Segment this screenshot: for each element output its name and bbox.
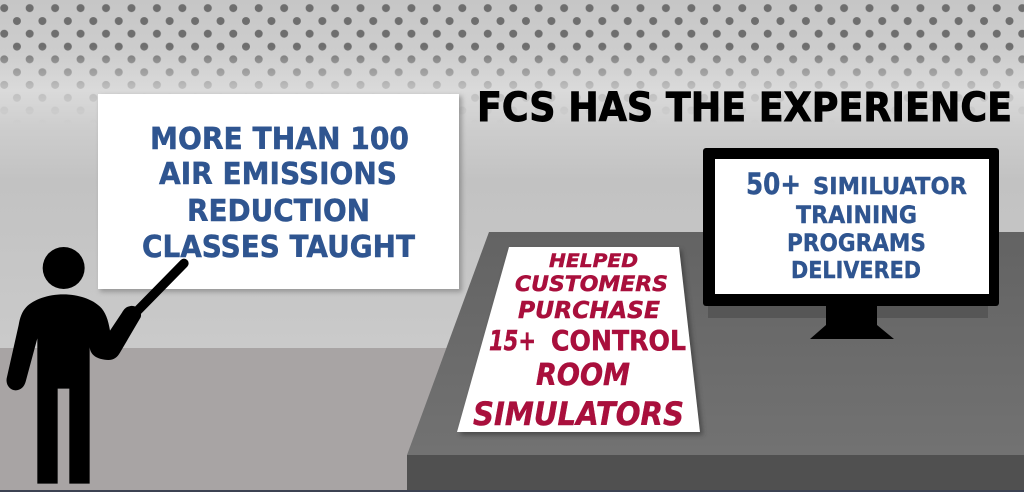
text: classes taught: MORE THAN 100 [150, 122, 409, 157]
text: simulator training programs: SIMILUATOR [813, 174, 967, 200]
text: control room simulators: 15+ [489, 325, 536, 357]
text: simulator training programs: TRAINING [796, 201, 917, 229]
text: control room simulators: PURCHASE [518, 298, 660, 324]
floor [0, 348, 1024, 492]
panel: paper on desk [457, 247, 703, 435]
text: classes taught: CLASSES TAUGHT [142, 230, 415, 265]
text: classes taught [142, 122, 415, 265]
text: control room simulators [473, 251, 686, 433]
bottom edge line [0, 490, 1024, 492]
text: simulator training programs: DELIVERED [791, 258, 921, 284]
icon: presenter with pointer [7, 247, 184, 484]
text: control room simulators: HELPED [549, 251, 638, 272]
text: simulator training programs: PROGRAMS [787, 229, 926, 257]
text: classes taught: REDUCTION [187, 194, 370, 229]
desk [407, 232, 1024, 490]
text: simulator training programs: 50+ [746, 167, 801, 201]
text: control room simulators: SIMULATORS [473, 395, 684, 433]
panel: whiteboard with classes taught [98, 94, 462, 292]
text: simulator training programs [746, 167, 967, 284]
halftone dot pattern [0, 4, 1024, 110]
icon: monitor [703, 148, 999, 339]
text: control room simulators: ROOM [536, 358, 630, 393]
text: control room simulators: CUSTOMERS [515, 272, 668, 297]
wall background [0, 0, 1024, 348]
text: control room simulators: CONTROL [551, 325, 686, 357]
text: classes taught: AIR EMISSIONS [159, 157, 397, 192]
